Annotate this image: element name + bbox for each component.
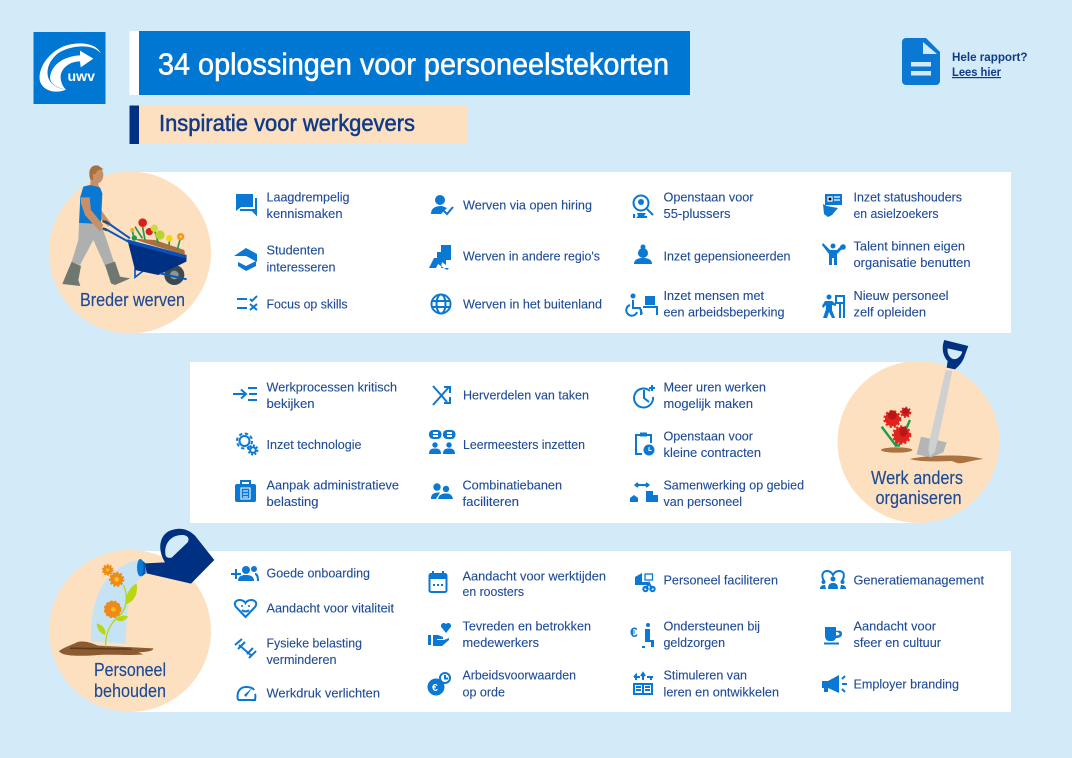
logo: UWV: uwv bbox=[68, 68, 95, 84]
item: Openstaan voor kleine contracten: Openstaan voor bbox=[664, 428, 754, 444]
logo: UWV bbox=[34, 32, 106, 104]
item: Aandacht voor vitaliteit: Aandacht voor vitaliteit bbox=[266, 600, 394, 616]
illustration: shovel and flowers bbox=[881, 340, 983, 463]
item: Werven in het buitenland: Werven in het buitenland bbox=[463, 296, 602, 312]
item: Samenwerking op gebied van personeel: Samenwerking op gebied bbox=[664, 478, 804, 492]
panel: werk anders organiseren bbox=[190, 340, 1000, 523]
item: Personeel faciliteren bbox=[635, 572, 778, 591]
item: Herverdelen van taken: Herverdelen van taken bbox=[463, 388, 589, 402]
item: Personeel faciliteren: Personeel faciliteren bbox=[664, 572, 778, 588]
item: Inzet mensen met een arbeidsbeperking bbox=[626, 288, 784, 320]
item: Aandacht voor sfeer en cultuur: sfeer en cultuur bbox=[854, 635, 942, 650]
item: Meer uren werken mogelijk maken bbox=[634, 380, 766, 411]
item: Tevreden en betrokken medewerkers bbox=[428, 618, 591, 650]
item: Openstaan voor kleine contracten: kleine contracten bbox=[664, 445, 761, 460]
circle label: Personeel bbox=[94, 660, 166, 680]
item: Inzet technologie bbox=[237, 434, 362, 454]
item: Arbeidsvoorwaarden op orde: € bbox=[432, 682, 438, 694]
circle label: organiseren bbox=[876, 488, 962, 508]
item: Studenten interesseren bbox=[234, 242, 336, 274]
item: Focus op skills: Focus op skills bbox=[266, 296, 348, 312]
item: Ondersteunen bij geldzorgen: geldzorgen bbox=[664, 635, 725, 650]
item: Openstaan voor kleine contracten bbox=[636, 428, 761, 460]
item: Inzet mensen met een arbeidsbeperking: een arbeidsbeperking bbox=[664, 304, 784, 320]
item: Combinatiebanen faciliteren: faciliteren bbox=[462, 494, 519, 509]
item: Leermeesters inzetten: Leermeesters inzetten bbox=[463, 437, 585, 452]
item: Talent binnen eigen organisatie benutten bbox=[822, 238, 970, 270]
item: Fysieke belasting verminderen: verminderen bbox=[266, 652, 336, 667]
subtitle banner: Inspiratie voor werkgevers bbox=[159, 110, 415, 136]
item: Stimuleren van leren en ontwikkelen: leren en ontwikkelen bbox=[664, 684, 779, 700]
item: Laagdrempelig kennismaken: Laagdrempelig bbox=[266, 190, 350, 204]
title banner: 34 oplossingen voor personeelstekorten bbox=[158, 48, 669, 82]
item: Tevreden en betrokken medewerkers: medewerkers bbox=[462, 635, 539, 650]
item: Nieuw personeel zelf opleiden bbox=[822, 288, 949, 320]
subtitle banner bbox=[130, 106, 468, 144]
item: Arbeidsvoorwaarden op orde bbox=[428, 668, 576, 700]
item: Aandacht voor werktijden en roosters: Aandacht voor werktijden bbox=[462, 568, 606, 584]
item: Aanpak administratieve belasting bbox=[235, 478, 399, 509]
item: Aanpak administratieve belasting: Aanpak administratieve bbox=[266, 478, 399, 492]
item: Werkdruk verlichten: Werkdruk verlichten bbox=[266, 686, 380, 700]
item: Werkprocessen kritisch bekijken: Werkprocessen kritisch bbox=[266, 380, 397, 394]
report link bbox=[902, 38, 1028, 85]
circle label bbox=[871, 468, 963, 508]
item: Aandacht voor sfeer en cultuur: Aandacht voor bbox=[854, 618, 937, 634]
item: Inzet mensen met een arbeidsbeperking: Inzet mensen met bbox=[664, 288, 764, 303]
item: Generatiemanagement bbox=[820, 571, 984, 589]
item: Samenwerking op gebied van personeel: van personeel bbox=[664, 494, 742, 509]
item: Openstaan voor 55-plussers bbox=[633, 190, 754, 221]
item: Fysieke belasting verminderen bbox=[235, 636, 362, 667]
item: Leermeesters inzetten bbox=[429, 430, 585, 454]
item: Inzet statushouders en asielzoekers bbox=[823, 190, 962, 221]
circle label bbox=[94, 660, 166, 701]
item: Werven via open hiring: Werven via open hiring bbox=[463, 198, 592, 212]
item: Combinatiebanen faciliteren: Combinatiebanen bbox=[462, 478, 562, 492]
item: Studenten interesseren: Studenten bbox=[266, 242, 324, 258]
circle label: behouden bbox=[94, 681, 166, 701]
title banner bbox=[130, 31, 690, 95]
item: Meer uren werken mogelijk maken: mogelijk maken bbox=[664, 396, 753, 411]
item: Employer branding: Employer branding bbox=[854, 676, 959, 692]
item: Employer branding bbox=[822, 675, 959, 693]
item: Arbeidsvoorwaarden op orde: Arbeidsvoorwaarden bbox=[462, 668, 576, 682]
circle label: Werk anders bbox=[871, 468, 963, 488]
item: Aandacht voor werktijden en roosters: en roosters bbox=[462, 584, 524, 599]
item: Fysieke belasting verminderen: Fysieke belasting bbox=[266, 636, 362, 650]
item: Inzet gepensioneerden: Inzet gepensioneerden bbox=[664, 248, 790, 264]
item: Openstaan voor 55-plussers: 55-plussers bbox=[664, 206, 731, 221]
item: Inzet statushouders en asielzoekers: en asielzoekers bbox=[854, 206, 939, 221]
item: Inzet statushouders en asielzoekers: Inzet statushouders bbox=[854, 190, 962, 204]
text: report link: Lees hier bbox=[952, 65, 1001, 79]
item: Inzet technologie: Inzet technologie bbox=[266, 437, 362, 452]
item: Werkprocessen kritisch bekijken bbox=[233, 380, 397, 411]
item: Combinatiebanen faciliteren bbox=[431, 478, 562, 509]
illustration: man with wheelbarrow bbox=[62, 165, 187, 286]
item: Laagdrempelig kennismaken bbox=[236, 190, 350, 221]
item: Werven via open hiring bbox=[431, 195, 592, 214]
item: Nieuw personeel zelf opleiden: Nieuw personeel bbox=[854, 288, 949, 303]
item: Nieuw personeel zelf opleiden: zelf opleiden bbox=[854, 304, 926, 320]
item: Openstaan voor 55-plussers: Openstaan voor bbox=[664, 190, 754, 204]
item: Ondersteunen bij geldzorgen bbox=[630, 618, 760, 650]
circle label: Breder werven bbox=[80, 290, 185, 310]
text: report link bbox=[952, 50, 1028, 79]
item: Ondersteunen bij geldzorgen: Ondersteunen bij bbox=[664, 618, 760, 634]
item: Werven in andere regio's bbox=[429, 245, 600, 270]
item: Werkprocessen kritisch bekijken: bekijken bbox=[266, 396, 314, 411]
item: Focus op skills bbox=[237, 296, 348, 312]
item: Aanpak administratieve belasting: belasting bbox=[266, 494, 318, 509]
icon: document bbox=[902, 38, 940, 85]
item: Inzet gepensioneerden bbox=[634, 244, 790, 264]
item: Werven in andere regio's: Werven in andere regio's bbox=[463, 248, 600, 264]
item: Generatiemanagement: Generatiemanagement bbox=[854, 572, 984, 588]
item: Aandacht voor vitaliteit bbox=[235, 600, 394, 617]
panel: breder werven bbox=[49, 165, 1011, 334]
item: Laagdrempelig kennismaken: kennismaken bbox=[266, 206, 342, 221]
item: Studenten interesseren: interesseren bbox=[266, 260, 336, 274]
item: Meer uren werken mogelijk maken: Meer uren werken bbox=[664, 380, 766, 394]
item: Talent binnen eigen organisatie benutten: organisatie benutten bbox=[854, 255, 970, 270]
panel: personeel behouden bbox=[49, 529, 1011, 712]
item: Stimuleren van leren en ontwikkelen: Stimuleren van bbox=[664, 668, 747, 682]
item: Ondersteunen bij geldzorgen: € bbox=[630, 624, 638, 640]
item: Arbeidsvoorwaarden op orde: op orde bbox=[462, 684, 505, 700]
text: report link: Hele rapport? bbox=[952, 50, 1028, 64]
illustration: watering can and flowers bbox=[59, 529, 214, 656]
item: Tevreden en betrokken medewerkers: Tevreden en betrokken bbox=[462, 618, 591, 634]
item: Stimuleren van leren en ontwikkelen bbox=[634, 668, 779, 700]
item: Aandacht voor werktijden en roosters bbox=[430, 568, 606, 599]
item: Herverdelen van taken bbox=[433, 386, 589, 405]
item: Aandacht voor sfeer en cultuur bbox=[824, 618, 942, 650]
item: Samenwerking op gebied van personeel bbox=[630, 478, 804, 509]
item: Werven in het buitenland bbox=[432, 294, 602, 314]
item: Talent binnen eigen organisatie benutten: Talent binnen eigen bbox=[854, 238, 965, 254]
item: Goede onboarding: Goede onboarding bbox=[266, 566, 370, 580]
